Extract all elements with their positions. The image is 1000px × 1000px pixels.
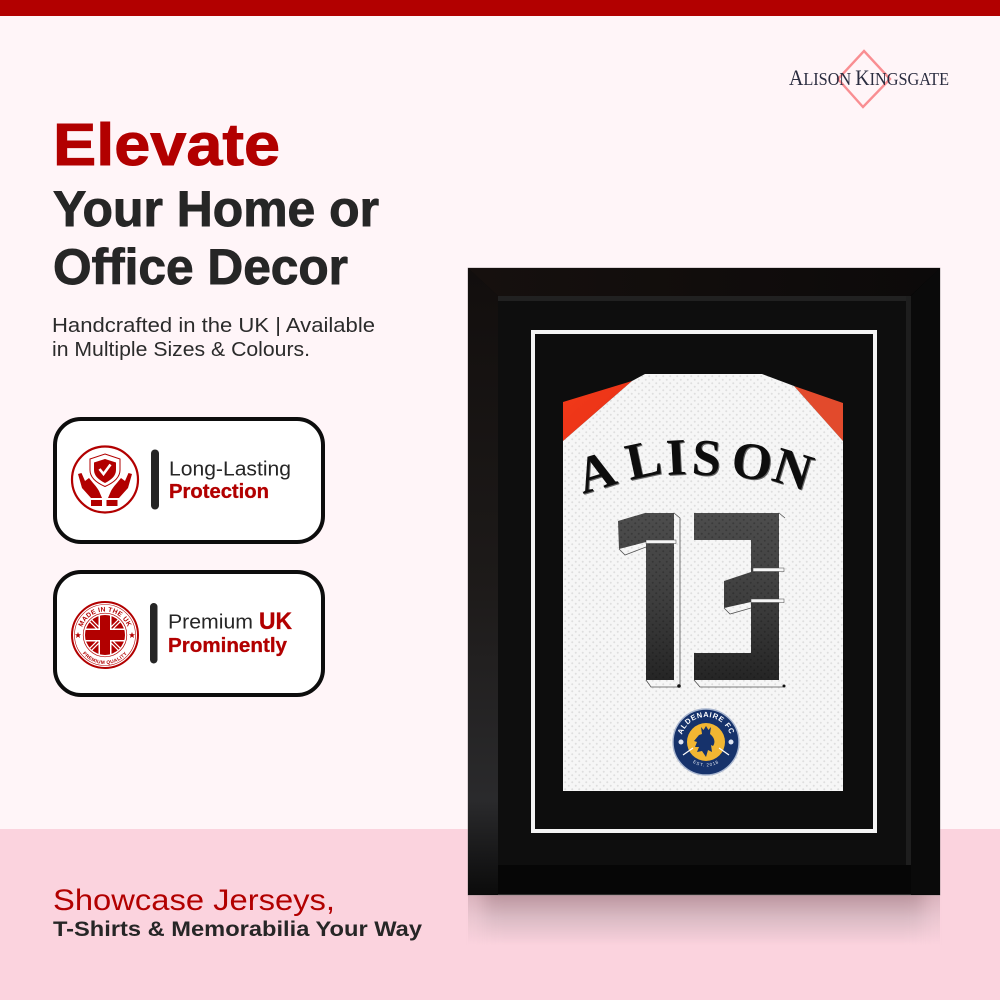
sleeve colours: [563, 381, 632, 441]
card text: Protection: [169, 481, 269, 503]
logo: Alison Kingsgate: [789, 51, 949, 107]
card text: Prominently: [168, 634, 288, 657]
bottom pink floor band: [0, 829, 1000, 1000]
lion head: [694, 726, 714, 757]
card text: Long-Lasting: [169, 458, 291, 480]
flag: [85, 615, 125, 655]
heading: [53, 112, 379, 295]
framed jersey: [468, 268, 940, 896]
card text: UK: [259, 608, 293, 635]
icon: made in the UK stamp: MADE IN THE UK: [78, 606, 132, 627]
mat board: [498, 296, 910, 865]
subheading text: [52, 314, 375, 361]
club crest: ALDENAIRE FC: [678, 712, 734, 735]
club crest: [672, 708, 740, 776]
heading: Elevate: [53, 112, 280, 178]
top red bar: [0, 0, 1000, 16]
heading: Office Decor: [53, 239, 348, 295]
bottom caption: [53, 884, 422, 941]
frame: outer moulding: [468, 268, 940, 895]
bottom caption: Showcase Jerseys,: [53, 884, 335, 917]
card text: [168, 608, 293, 657]
subheading text: Handcrafted in the UK | Available: [52, 314, 375, 337]
divider bar: [150, 603, 158, 664]
divider bar: [151, 450, 159, 510]
white inner line: [533, 332, 875, 831]
jersey: [563, 374, 843, 791]
jersey body: [563, 374, 843, 791]
name: ALISON: [570, 429, 819, 505]
number 13: [618, 513, 786, 688]
icon: shield and hands: [72, 446, 138, 512]
card text: Premium: [168, 612, 253, 634]
card text: [169, 458, 291, 503]
subheading text: in Multiple Sizes & Colours.: [52, 338, 310, 361]
club crest: EST. 2018: [693, 760, 718, 766]
heading: Your Home or: [53, 181, 379, 237]
icon: made in the UK stamp: PREMIUM QUALITY: [82, 651, 126, 665]
bottom caption: T-Shirts & Memorabilia Your Way: [53, 917, 422, 941]
frame reflection shadow: [468, 895, 940, 945]
card: long-lasting protection: [55, 419, 323, 542]
card: premium UK: [53, 570, 325, 697]
logo: Alison Kingsgate: ALISON KINGSGATE: [789, 65, 949, 90]
icon: made in the UK stamp: [71, 601, 139, 669]
